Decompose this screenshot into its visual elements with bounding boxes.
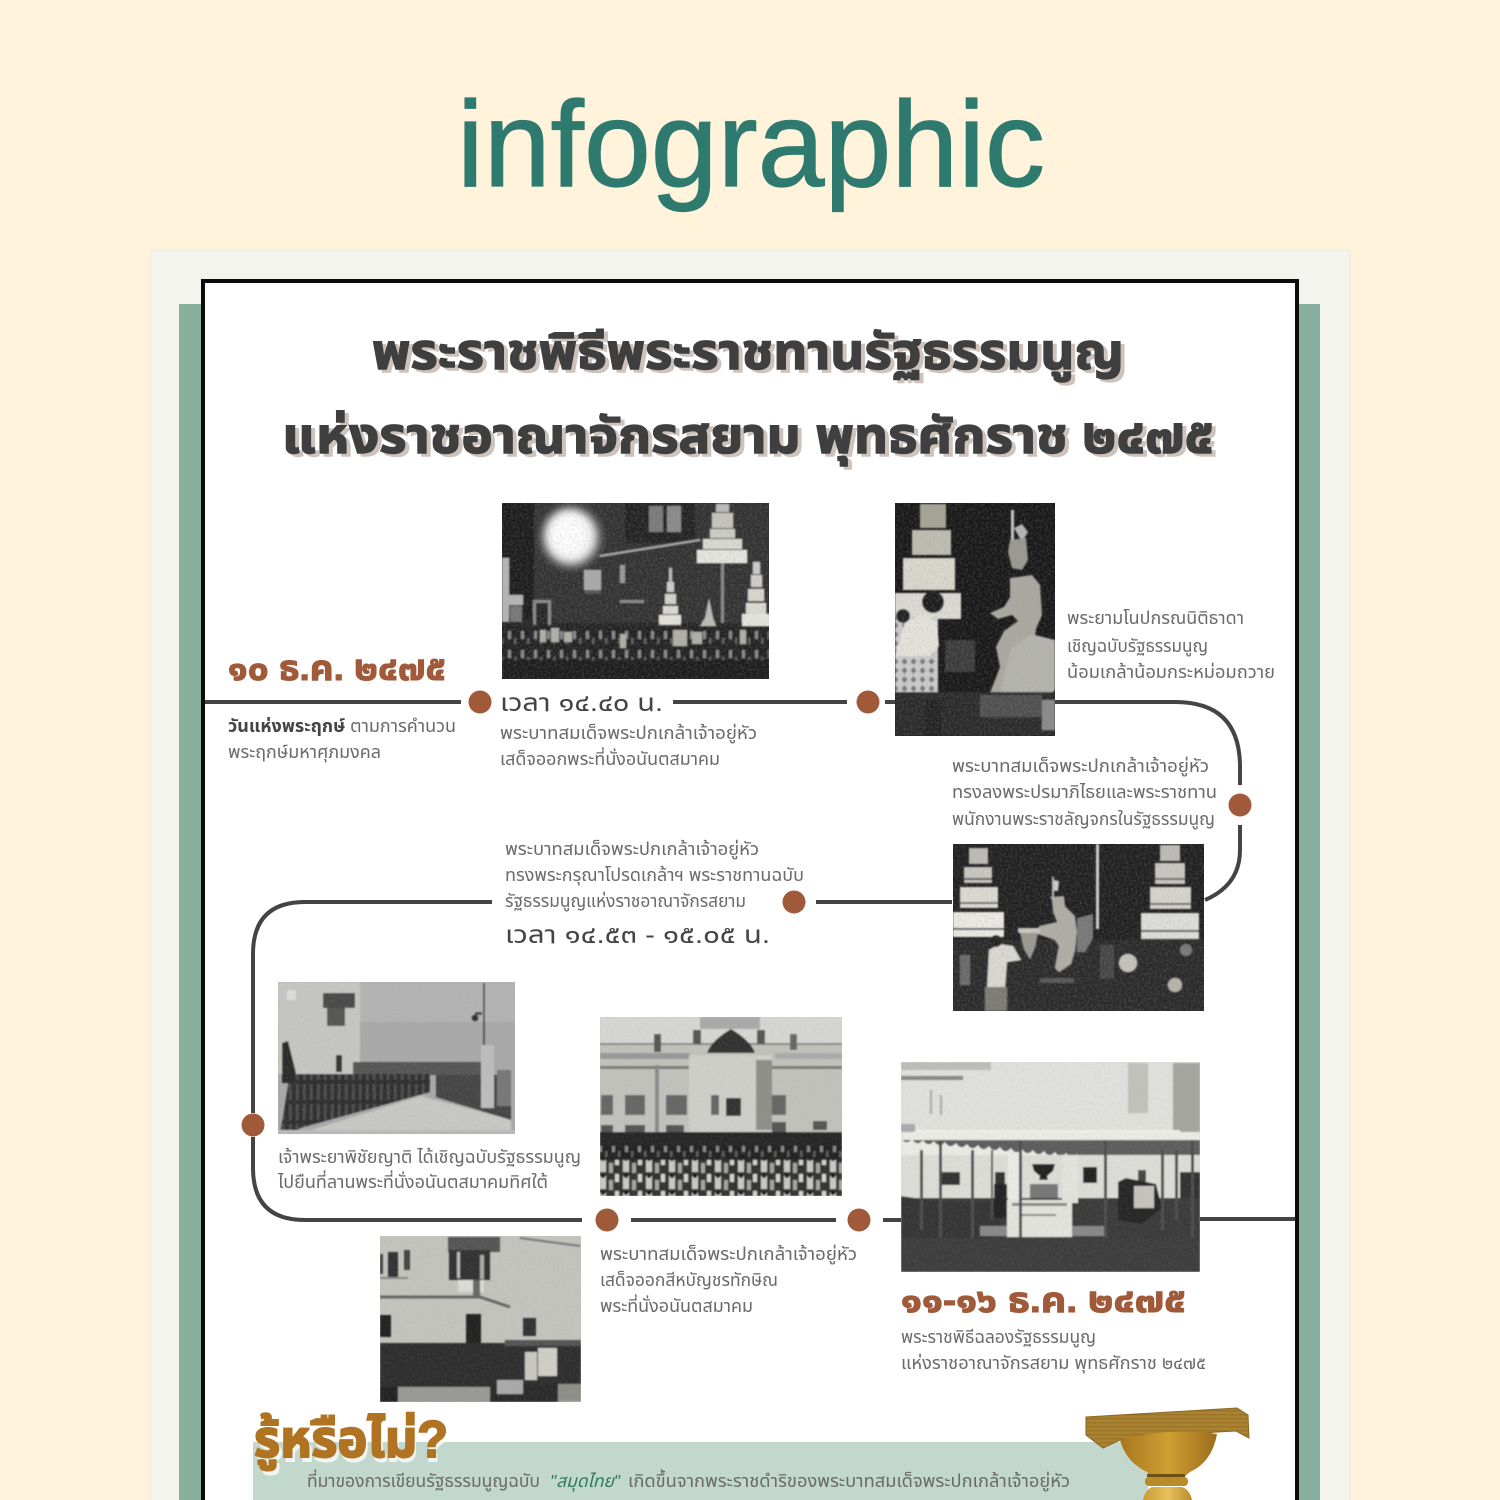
- text: Chao Phraya Phichai Yat: [277, 1147, 581, 1192]
- text: Chao Phraya Phichai Yat: เจ้าพระยาพิชัยญาติ ได้เชิญฉบับรัฐธรรมนูญ: [278, 1147, 581, 1169]
- text: the king graciously grants: [505, 839, 804, 913]
- text: minister of justice presents: [1067, 608, 1275, 682]
- panel: green backing: [179, 304, 1320, 1500]
- photo: minister presenting the constitution: [895, 503, 1055, 736]
- photo: soldiers in formation: [278, 982, 515, 1134]
- text: minister of justice presents: น้อมเกล้าน้อมกระหม่อมถวาย: [1067, 662, 1275, 682]
- text: the king graciously grants: พระบาทสมเด็จพระปกเกล้าเจ้าอยู่หัว: [505, 839, 759, 861]
- panel: did you know box: [253, 1442, 1148, 1500]
- text: the king leaves the hall: [500, 723, 757, 769]
- heading: infographic: infographic: [457, 76, 1045, 212]
- text: the king appears at south balcony: พระบาทสมเด็จพระปกเกล้าเจ้าอยู่หัว: [600, 1244, 857, 1266]
- text: origin of the Samut Thai constitution: ที่มาของการเขียนรัฐธรรมนูญฉบับ: [307, 1469, 540, 1493]
- panel: white sheet with black border: [203, 281, 1297, 1500]
- photo: balcony and soldiers: [380, 1236, 581, 1402]
- text: the king leaves the hall: เสด็จออกพระที่นั่งอนันตสมาคม: [500, 747, 720, 769]
- time: 14.40: เวลา ๑๔.๔๐ น.: [500, 689, 663, 717]
- text: day of Thursday: พระฤกษ์มหาศุภมงคล: [228, 742, 381, 763]
- heading: did you know: รู้หรือไม่?: [254, 1411, 448, 1471]
- title: two-line Thai heading: แห่งราชอาณาจักรสยาม พุทธศักราช ๒๔๗๕: [282, 408, 1214, 466]
- heading: did you know: รู้หรือไม่?: [257, 1415, 449, 1475]
- text: day of Thursday: [228, 716, 456, 763]
- text: day of Thursday: วันแห่งพระฤกษ์ ตามการคำนวน: [228, 716, 456, 736]
- text: Chao Phraya Phichai Yat: ไปยืนที่ลานพระที่นั่งอนันตสมาคมทิศใต้: [277, 1170, 548, 1192]
- text: celebration of the constitution: แห่งราชอาณาจักรสยาม พุทธศักราช ๒๔๗๕: [901, 1353, 1206, 1374]
- title: two-line Thai heading: [282, 324, 1218, 469]
- text: the king appears at south balcony: พระที่นั่งอนันตสมาคม: [600, 1294, 753, 1316]
- icon: golden pedestal tray: [1086, 1408, 1249, 1500]
- text: the king signs: พระบาทสมเด็จพระปกเกล้าเจ้าอยู่หัว: [952, 756, 1209, 778]
- text: the king graciously grants: รัฐธรรมนูญแห่งราชอาณาจักรสยาม: [505, 891, 746, 913]
- text: the king graciously grants: ทรงพระกรุณาโปรดเกล้าฯ พระราชทานฉบับ: [505, 865, 804, 886]
- timeline path: [205, 702, 1295, 1220]
- timeline dots: [242, 690, 1252, 1232]
- photo: pavilion with constitution on pedestal: [901, 1062, 1200, 1272]
- text: the king signs: [952, 756, 1217, 831]
- title: two-line Thai heading: แห่งราชอาณาจักรสยาม พุทธศักราช ๒๔๗๕: [286, 411, 1218, 469]
- text: celebration of the constitution: [901, 1327, 1206, 1374]
- text: celebration of the constitution: พระราชพิธีฉลองรัฐธรรมนูญ: [901, 1327, 1096, 1349]
- text: the king appears at south balcony: เสด็จออกสีหบัญชรทักษิณ: [600, 1270, 778, 1290]
- photo: Ananta Samakhom throne hall and crowd: [600, 1017, 842, 1196]
- text: the king appears at south balcony: [600, 1244, 857, 1316]
- title: two-line Thai heading: พระราชพิธีพระราชทานรัฐธรรมนูญ: [372, 324, 1124, 382]
- title: two-line Thai heading: พระราชพิธีพระราชทานรัฐธรรมนูญ: [376, 327, 1128, 385]
- time: 14.53 to 15.05: เวลา ๑๔.๕๓ - ๑๕.๐๕ น.: [505, 921, 770, 949]
- date: 10 Dec 2475: ๑๐ ธ.ค. ๒๔๗๕: [228, 649, 446, 688]
- text: the king signs: พนักงานพระราชลัญจกรในรัฐธรรมนูญ: [952, 809, 1215, 831]
- date: 11 to 16 Dec 2475: ๑๑-๑๖ ธ.ค. ๒๔๗๕: [901, 1281, 1186, 1320]
- text: origin of the Samut Thai constitution: เกิดขึ้นจากพระราชดำริของพระบาทสมเด็จพระปกเกล้าเจ้าอยู่หัว: [628, 1469, 1070, 1493]
- text: minister of justice presents: เชิญฉบับรัฐธรรมนูญ: [1067, 636, 1208, 658]
- text: the king leaves the hall: พระบาทสมเด็จพระปกเกล้าเจ้าอยู่หัว: [500, 723, 757, 745]
- text: origin of the Samut Thai constitution: "สมุดไทย": [550, 1471, 621, 1492]
- photo: king on throne with tiered umbrellas: [953, 844, 1204, 1011]
- panel: outer light card: [150, 250, 1350, 1500]
- photo: throne hall ceremony: [502, 503, 770, 679]
- text: the king signs: ทรงลงพระปรมาภิไธยและพระราชทาน: [952, 782, 1217, 802]
- text: minister of justice presents: พระยามโนปกรณนิติธาดา: [1067, 608, 1244, 628]
- text: origin of the Samut Thai constitution: [307, 1469, 1070, 1493]
